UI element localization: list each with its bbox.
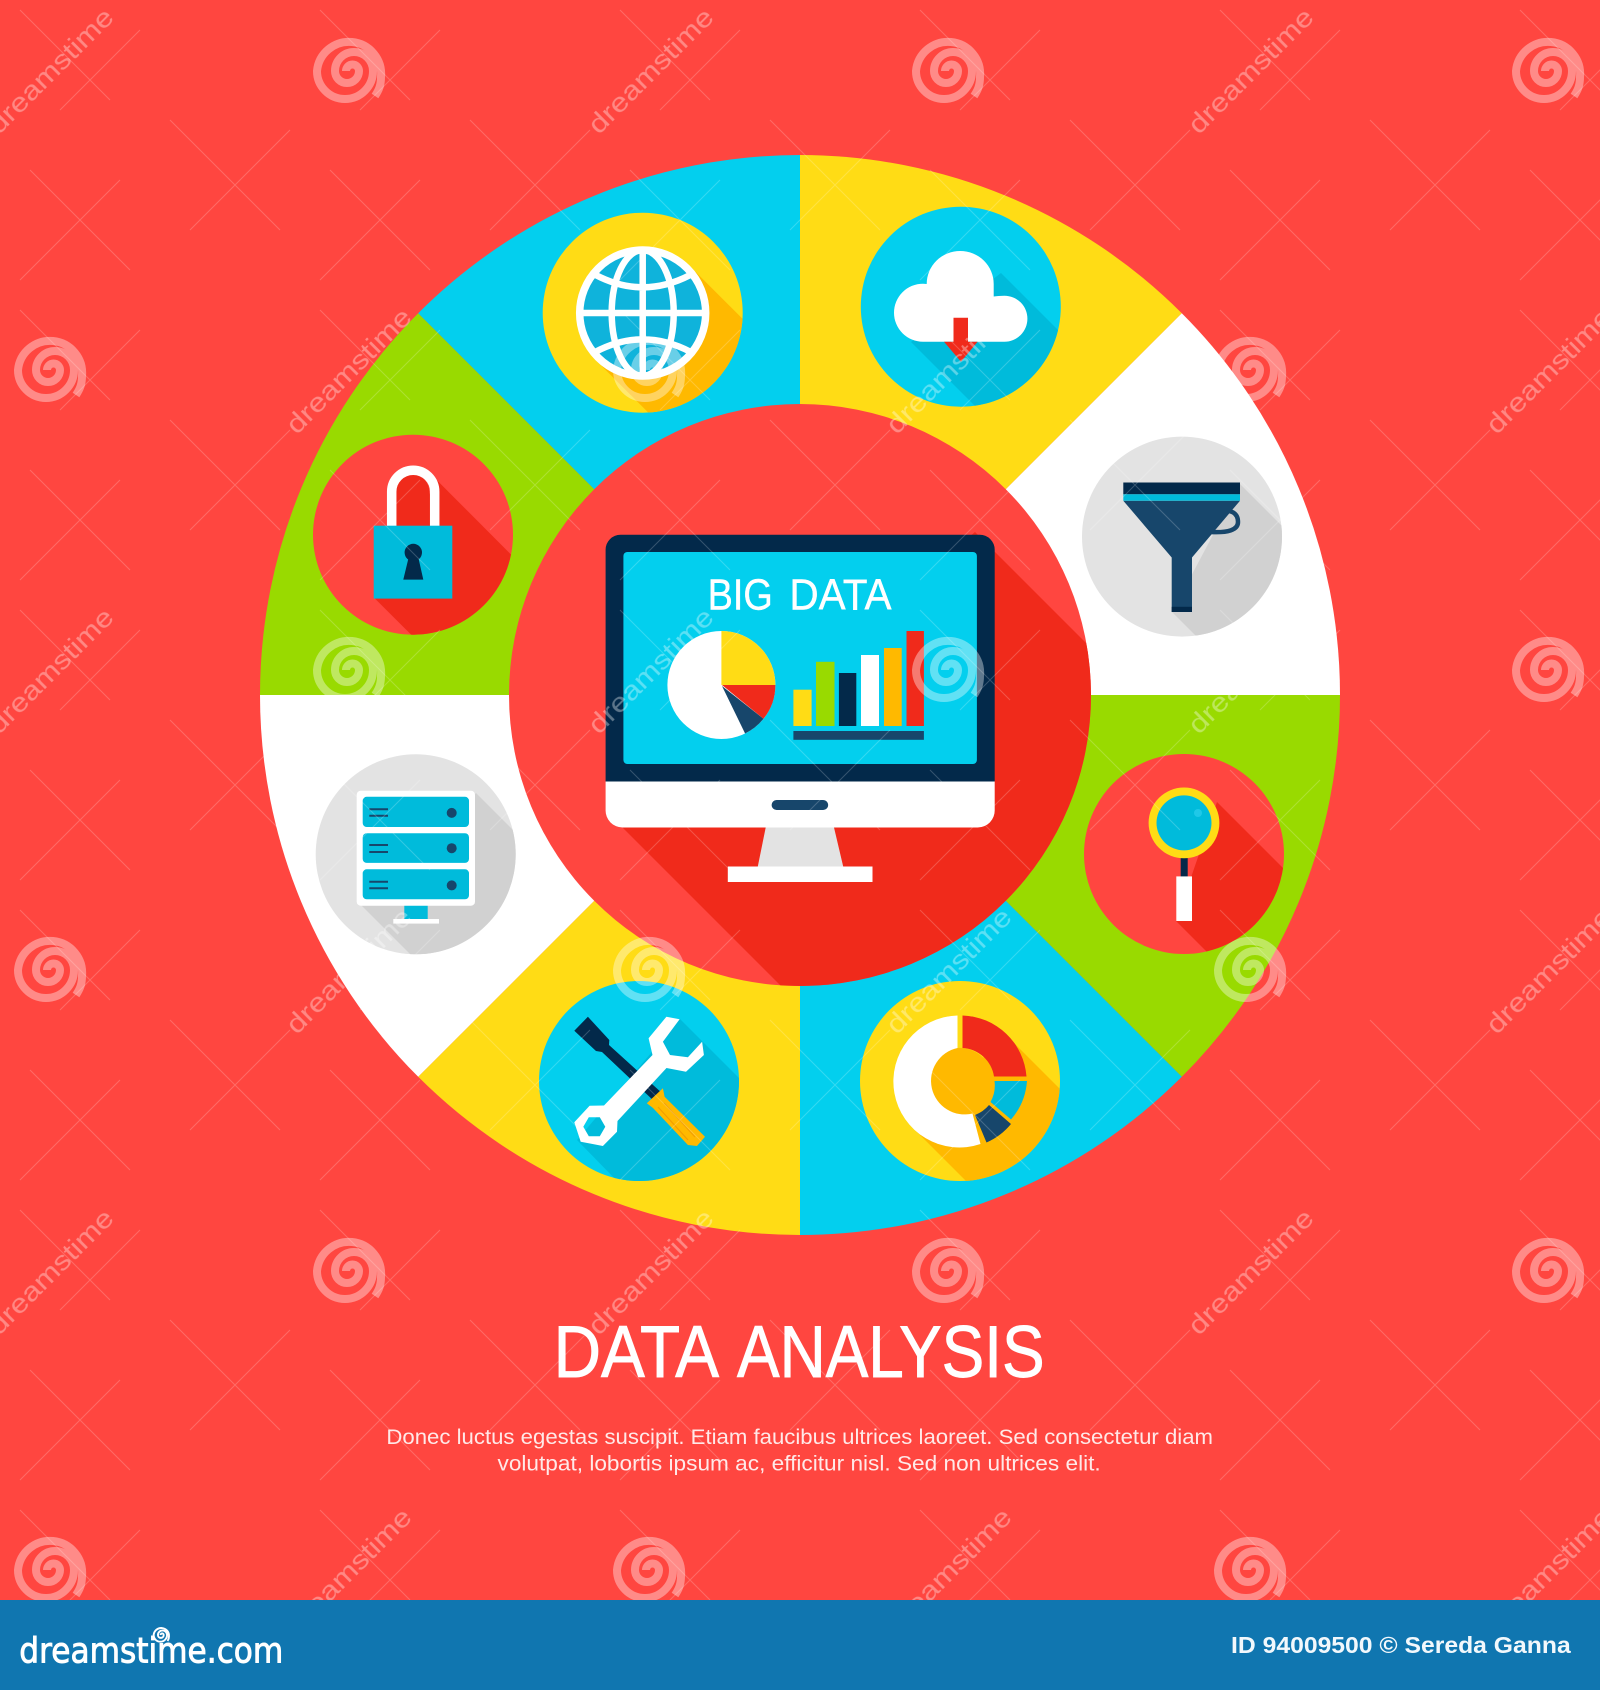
bar chart xyxy=(793,631,924,740)
footer logo: dreamstime.com xyxy=(19,1632,283,1672)
watermark text: dreamstime xyxy=(1480,1502,1600,1640)
watermark text: dreamstime xyxy=(880,1502,1018,1640)
icon: magnifying glass xyxy=(1084,754,1284,954)
icon: funnel xyxy=(1082,436,1282,636)
screen heading: DATA xyxy=(789,571,892,620)
watermark text: dreamstime xyxy=(880,302,1018,440)
ring of eight coloured segments xyxy=(260,155,1340,1235)
icon: wrench and screwdriver xyxy=(539,981,739,1181)
title: DATA xyxy=(554,1312,719,1393)
footer credit: ID 94009500 © Sereda Ganna xyxy=(1231,1632,1572,1658)
watermark text: dreamstime xyxy=(1182,1203,1320,1341)
description text: volutpat, lobortis ipsum ac, efficitur nisl. Sed non ultrices elit. xyxy=(498,1453,1101,1476)
icon: cloud download xyxy=(860,206,1061,407)
watermark text: dreamstime xyxy=(880,902,1018,1040)
centre circle with monitor xyxy=(509,404,1091,986)
icon: padlock xyxy=(313,434,513,635)
watermark text: dreamstime xyxy=(1182,2,1320,140)
description text xyxy=(386,1426,1213,1476)
watermark text: dreamstime xyxy=(280,302,418,440)
watermark text: dreamstime xyxy=(280,902,418,1040)
watermark text: dreamstime xyxy=(280,1502,418,1640)
icon: server xyxy=(316,754,516,954)
watermark text: dreamstime xyxy=(582,1203,720,1341)
watermark text: dreamstime xyxy=(1182,602,1320,740)
screen heading: BIG xyxy=(708,571,773,620)
watermark text: dreamstime xyxy=(582,2,720,140)
donut centre xyxy=(926,1048,993,1115)
watermark text: dreamstime xyxy=(1480,902,1600,1040)
watermark text: dreamstime xyxy=(1480,302,1600,440)
footer bar xyxy=(0,1600,1600,1690)
title: ANALYSIS xyxy=(737,1312,1045,1393)
icon: donut chart xyxy=(860,981,1060,1181)
pie chart xyxy=(667,631,775,739)
description text: Donec luctus egestas suscipit. Etiam faucibus ultrices laoreet. Sed consectetur diam xyxy=(386,1426,1213,1449)
monitor xyxy=(606,535,995,882)
title xyxy=(554,1312,1045,1393)
watermark text: dreamstime xyxy=(582,602,720,740)
icon: globe xyxy=(542,212,743,413)
screen heading xyxy=(708,571,892,620)
